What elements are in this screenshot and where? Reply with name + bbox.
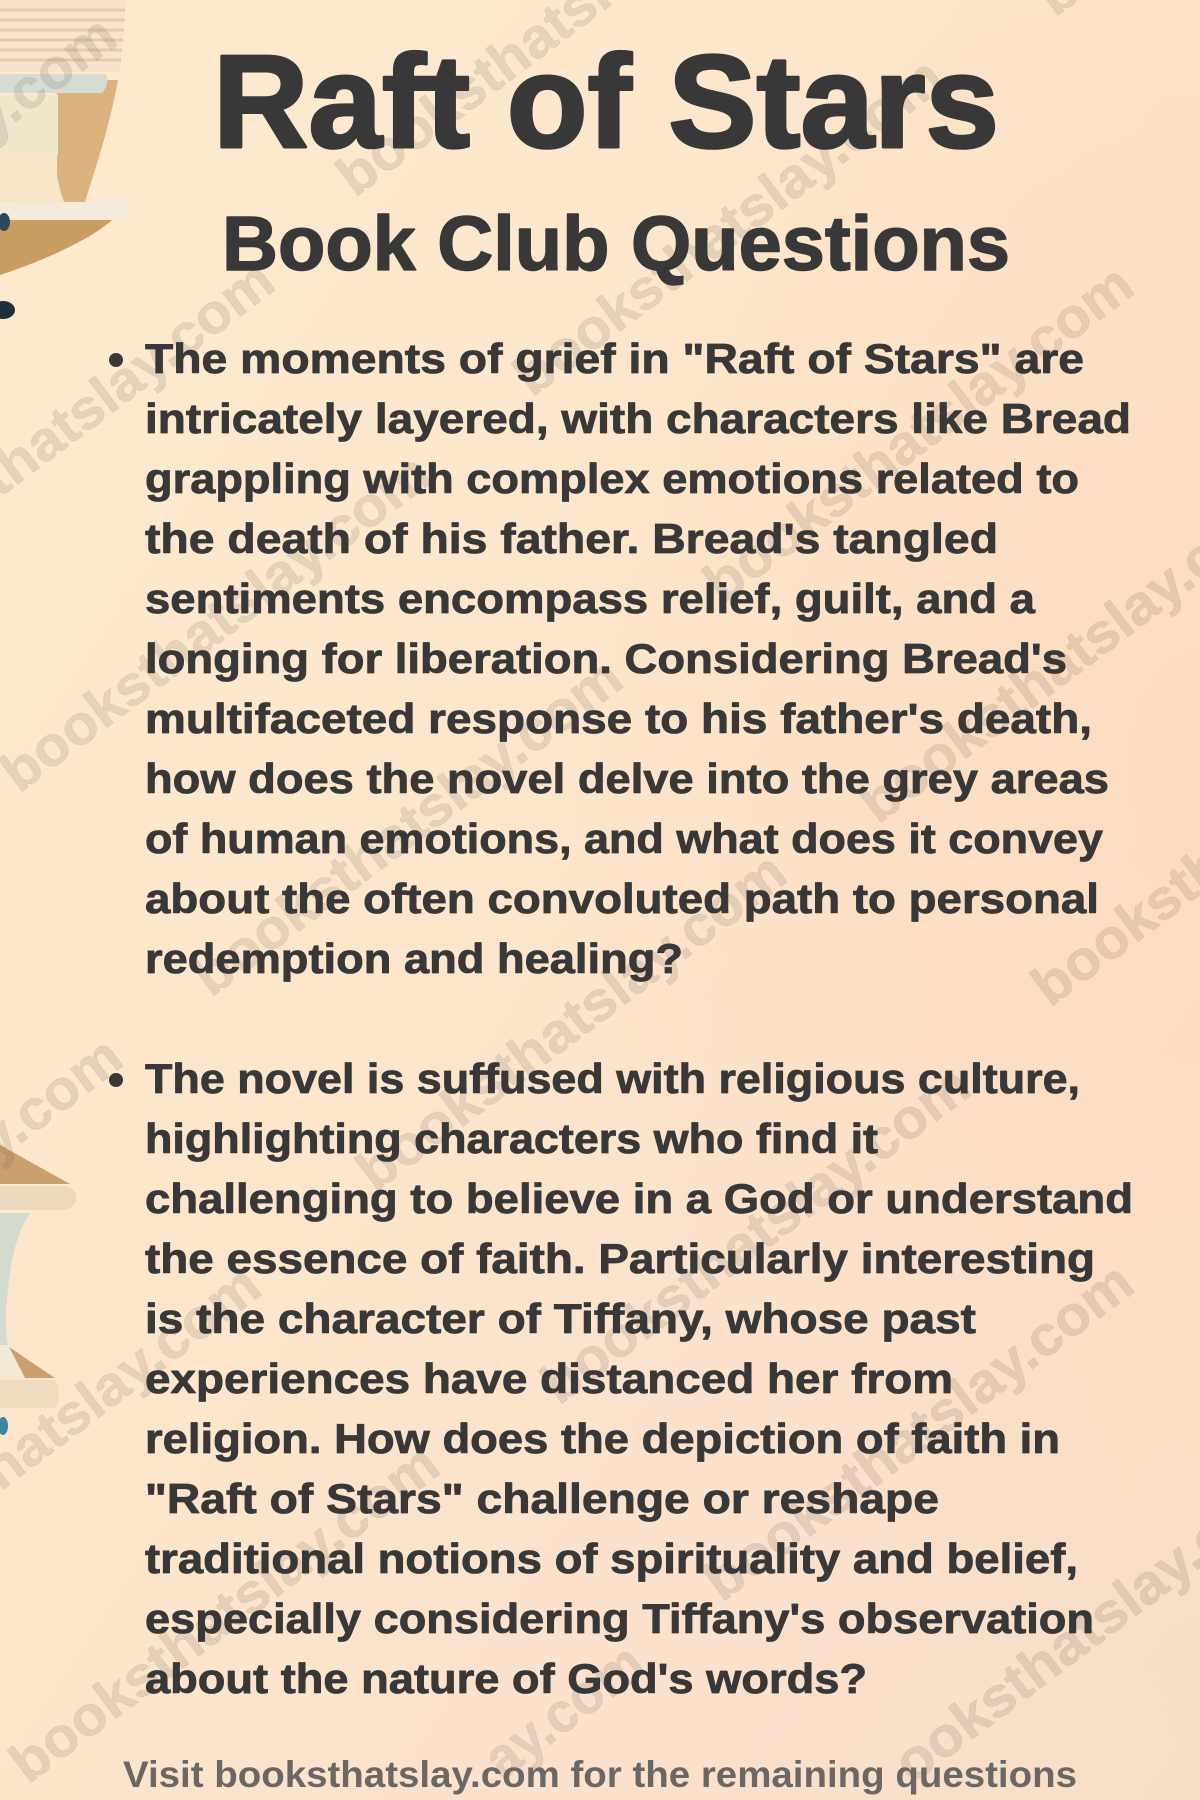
watermarks: booksthatslay.com [0, 1431, 451, 1795]
question 1: intricately layered, with characters like Bread [145, 395, 1131, 442]
bullet 2 [109, 1073, 123, 1087]
question 2: highlighting characters who find it [145, 1115, 878, 1162]
question 1 [109, 335, 1131, 982]
watermarks: booksthatslay.com [501, 44, 955, 408]
question 1: multifaceted response to his father's death, [145, 695, 1092, 742]
question 1: sentiments encompass relief, guilt, and a [145, 575, 1036, 622]
question 2: experiences have distanced her from [145, 1355, 953, 1402]
question 1: how does the novel delve into the grey areas [145, 755, 1109, 802]
image: stacked books top left [0, 0, 129, 319]
question 1: redemption and healing? [145, 935, 683, 982]
question 2: especially considering Tiffany's observation [145, 1595, 1094, 1642]
title: Raft of Stars [213, 28, 999, 175]
question 2 [109, 1055, 1133, 1702]
question 2: is the character of Tiffany, whose past [145, 1295, 976, 1342]
bullet 1 [109, 353, 123, 367]
question 2: challenging to believe in a God or understand [145, 1175, 1133, 1222]
footer call to action: Visit booksthatslay.com for the remaining questions [123, 1754, 1077, 1795]
subtitle: Book Club Questions [222, 201, 1010, 287]
question 1: longing for liberation. Considering Bread's [145, 635, 1067, 682]
question 2: religion. How does the depiction of faith in [145, 1415, 1060, 1462]
watermarks: booksthatslay.com [344, 839, 798, 1203]
question 2: "Raft of Stars" challenge or reshape [145, 1475, 939, 1522]
question 1: about the often convoluted path to personal [145, 875, 1099, 922]
question 1: The moments of grief in "Raft of Stars" are [145, 335, 1084, 382]
question 2: traditional notions of spirituality and belief, [145, 1535, 1078, 1582]
watermarks: booksthatslay.com [691, 1249, 1145, 1613]
question 2: The novel is suffused with religious culture, [145, 1055, 1080, 1102]
question 2: about the nature of God's words? [145, 1655, 867, 1702]
question 1: of human emotions, and what does it convey [145, 815, 1104, 862]
watermarks: booksthatslay.com [691, 251, 1145, 615]
watermarks: ay.com [471, 1630, 655, 1791]
question 1: the death of his father. Bread's tangled [145, 515, 998, 562]
watermarks: booksthatslay.com [0, 440, 442, 804]
image: stacked books lower left [0, 1145, 76, 1435]
watermarks: booksthatslay.com [180, 644, 634, 1008]
question 2: the essence of faith. Particularly interesting [145, 1235, 1095, 1282]
watermarks: booksthatslay.com [528, 1052, 982, 1416]
question 1: grappling with complex emotions related to [145, 455, 1079, 502]
